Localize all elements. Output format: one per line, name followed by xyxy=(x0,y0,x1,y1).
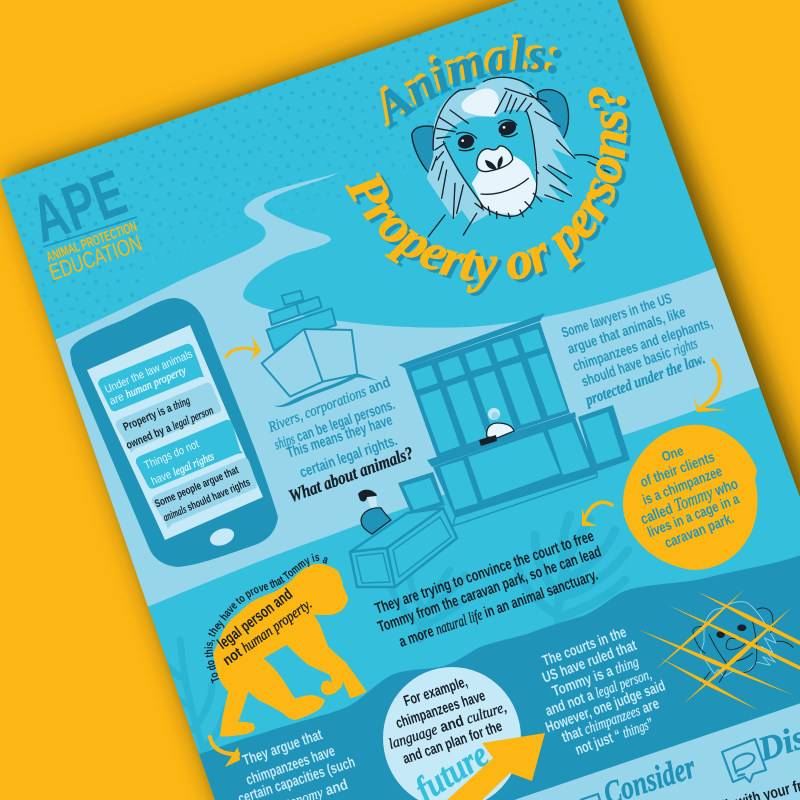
heading: Consider xyxy=(580,749,701,800)
clerk hair xyxy=(358,490,377,502)
ears xyxy=(412,90,569,178)
cage bars xyxy=(637,589,800,710)
text: rivers and ships: Rivers, corporations and xyxy=(265,373,393,436)
circle text: chimpanzees have xyxy=(394,687,487,732)
desk top xyxy=(350,508,443,552)
icon: chimpanzee head xyxy=(412,77,610,237)
text: convince the court: a more natural life in an animal sanctuary. xyxy=(397,566,600,650)
nose xyxy=(477,146,513,172)
text: courts ruled: However, one judge said xyxy=(543,677,668,736)
text: courts ruled: that chimpanzees are xyxy=(559,695,661,746)
circle xyxy=(383,667,521,800)
text: they argue: They argue that xyxy=(241,726,325,769)
phone screen xyxy=(87,325,263,540)
text: they argue xyxy=(236,726,357,800)
consider icon xyxy=(580,794,603,800)
bench base xyxy=(453,473,597,526)
text: lawyers argue: chimpanzees and elephants, xyxy=(571,315,715,375)
canopy xyxy=(398,313,545,368)
lower tier xyxy=(267,308,336,351)
leaf: centre xyxy=(390,565,470,640)
top tier xyxy=(282,291,303,305)
phone text 2: Property is a thing xyxy=(122,395,192,434)
text: courts ruled: Tommy is a thing xyxy=(550,653,641,700)
arrow head xyxy=(251,336,261,360)
text: lawyers argue: Some lawyers in the US xyxy=(560,291,674,342)
arrow: lawyers to blob xyxy=(693,360,727,412)
middle tier xyxy=(269,297,322,325)
panel: dark lower band xyxy=(180,552,800,800)
judge robe xyxy=(487,423,514,438)
nostrils xyxy=(485,156,503,169)
text: rivers and ships: ships can be legal persons. xyxy=(272,395,397,453)
phone text 3: have legal rights xyxy=(149,450,216,488)
text: convince the court: Tommy from the caravan park, so he can lead xyxy=(376,543,603,636)
phone text 3: Things do not xyxy=(143,438,201,472)
callout: future circle xyxy=(383,667,521,800)
leaf: left of monkey xyxy=(166,636,224,758)
circle text xyxy=(387,673,509,768)
phone text 1 xyxy=(103,348,195,408)
blob text: lives in a cage in a xyxy=(645,491,742,541)
eye highlights xyxy=(461,126,505,142)
courtroom xyxy=(398,313,630,526)
circle text: language and culture, xyxy=(387,699,509,753)
discuss icon xyxy=(722,739,766,782)
figure: judge xyxy=(479,408,514,446)
arrow: blob to court text xyxy=(582,502,612,526)
logo rule xyxy=(43,217,137,247)
hair xyxy=(427,77,575,224)
text: legal person on monkey: legal person and xyxy=(215,586,296,653)
text: rivers and ships xyxy=(265,373,416,506)
arrow: big future arrow xyxy=(447,733,545,800)
text: legal person on monkey: not human property. xyxy=(220,595,315,669)
panel: light band with river xyxy=(50,172,790,610)
clerk body xyxy=(361,508,391,534)
small chimp xyxy=(693,602,793,683)
title word front: Animals: xyxy=(384,37,562,130)
arrow shaft xyxy=(210,737,238,754)
clerk face xyxy=(367,496,377,509)
bench panels xyxy=(440,422,590,510)
judge wig xyxy=(488,408,500,420)
phone text 4: Some people argue that xyxy=(153,464,241,510)
palm leaves background xyxy=(152,515,628,780)
left wing inset xyxy=(403,478,440,510)
phone text 4: animals should have rights xyxy=(161,476,252,524)
arrow head xyxy=(582,508,597,526)
heading: Discuss xyxy=(722,700,800,782)
callout: Tommy blob xyxy=(623,425,758,570)
text: curved prove text: To do this, they have to prove that Tommy is a xyxy=(204,554,328,684)
arrow shaft xyxy=(226,348,256,357)
desk inset lines xyxy=(356,517,451,583)
text: convince the court: They are trying to convince the court to free xyxy=(373,528,596,618)
blob text: called Tommy who xyxy=(638,474,741,529)
text: courts ruled: US have ruled that xyxy=(540,637,639,687)
circle text: For example, xyxy=(402,673,470,710)
figure: clerk xyxy=(358,490,391,534)
text: they argue: chimpanzees have xyxy=(244,743,337,789)
left wing xyxy=(398,472,445,515)
blob text: One xyxy=(660,443,686,464)
muzzle xyxy=(472,156,537,215)
icon frame xyxy=(722,739,766,782)
leaf: below court xyxy=(518,515,628,640)
right wing xyxy=(578,405,630,472)
judge face xyxy=(491,412,499,420)
phone text 3 xyxy=(143,438,216,488)
desk right face xyxy=(387,508,457,587)
icon: monkey silhouette xyxy=(213,564,367,737)
blob text xyxy=(638,443,742,552)
text: rivers and ships: certain legal rights. xyxy=(298,432,400,481)
eyes xyxy=(458,121,516,149)
text: courts ruled: The courts in the xyxy=(540,624,629,670)
logo letters: APE xyxy=(22,155,135,256)
back panel cells xyxy=(411,329,567,453)
forehead xyxy=(461,88,499,117)
bubble 3 xyxy=(136,420,243,489)
logo line 2: EDUCATION xyxy=(46,230,145,285)
bench body xyxy=(433,417,597,517)
logo line 1: ANIMAL PROTECTION xyxy=(44,218,139,265)
title word back: Animals: xyxy=(380,34,558,127)
title: Animals xyxy=(380,34,562,130)
title: Property or persons xyxy=(344,87,632,296)
bench top xyxy=(427,412,576,467)
outline and hair strands xyxy=(428,77,610,237)
right wing inset xyxy=(582,412,622,464)
logo: APE xyxy=(38,170,142,280)
phone text 2: owned by a legal person xyxy=(124,404,215,452)
face xyxy=(443,110,537,215)
circle text: and can plan for the xyxy=(401,718,504,768)
text: rivers and ships: This means they have xyxy=(285,412,395,462)
text: courts ruled: and not a legal person, xyxy=(543,665,654,719)
curve for prove text xyxy=(213,561,333,681)
phone body xyxy=(70,298,278,567)
text: lawyers argue: argue that animals, like xyxy=(566,305,688,358)
arrow: phone to ship xyxy=(226,336,261,360)
arrow: monkey to argue text xyxy=(210,737,240,767)
bubble 2 xyxy=(116,383,221,453)
blob text: of their clients xyxy=(638,449,717,491)
text: lawyers argue: protected under the law. xyxy=(582,350,708,410)
icon: smartphone xyxy=(70,298,278,567)
arrow head xyxy=(693,394,727,412)
text: rivers and ships: What about animals? xyxy=(286,443,416,506)
clerk desk xyxy=(350,508,457,587)
back panel frame xyxy=(405,322,570,457)
home button xyxy=(210,528,234,546)
hull xyxy=(262,329,357,397)
title shadow: Property or persons? xyxy=(354,91,632,296)
phone text 1: Under the law animals xyxy=(103,348,195,396)
text: lawyers argue xyxy=(560,291,715,410)
bubble 1 xyxy=(98,344,204,411)
bubble 4 xyxy=(152,458,257,529)
dotted texture xyxy=(2,1,645,340)
water xyxy=(273,373,378,407)
text: convince the court xyxy=(373,528,603,650)
text: lawyers argue: should have basic rights xyxy=(579,334,700,390)
text: courts ruled: not just “ things” xyxy=(573,714,656,758)
arrow head xyxy=(225,747,240,767)
icon speech bubbles xyxy=(733,754,754,776)
laptop xyxy=(479,435,497,446)
arrow shaft xyxy=(698,360,720,410)
blob text: caravan park. xyxy=(663,511,737,552)
text: courts ruled xyxy=(540,624,668,758)
icon: caged chimp xyxy=(637,589,800,710)
desk left face xyxy=(350,548,395,587)
icon: ship xyxy=(262,291,378,407)
phone text 1: are human property xyxy=(108,364,188,408)
arrow shaft xyxy=(584,502,612,520)
blob text: is a chimpanzee xyxy=(640,464,725,509)
title fill: Property or persons? xyxy=(344,87,628,293)
panel: bottom light band xyxy=(514,703,800,800)
blob xyxy=(623,425,758,570)
